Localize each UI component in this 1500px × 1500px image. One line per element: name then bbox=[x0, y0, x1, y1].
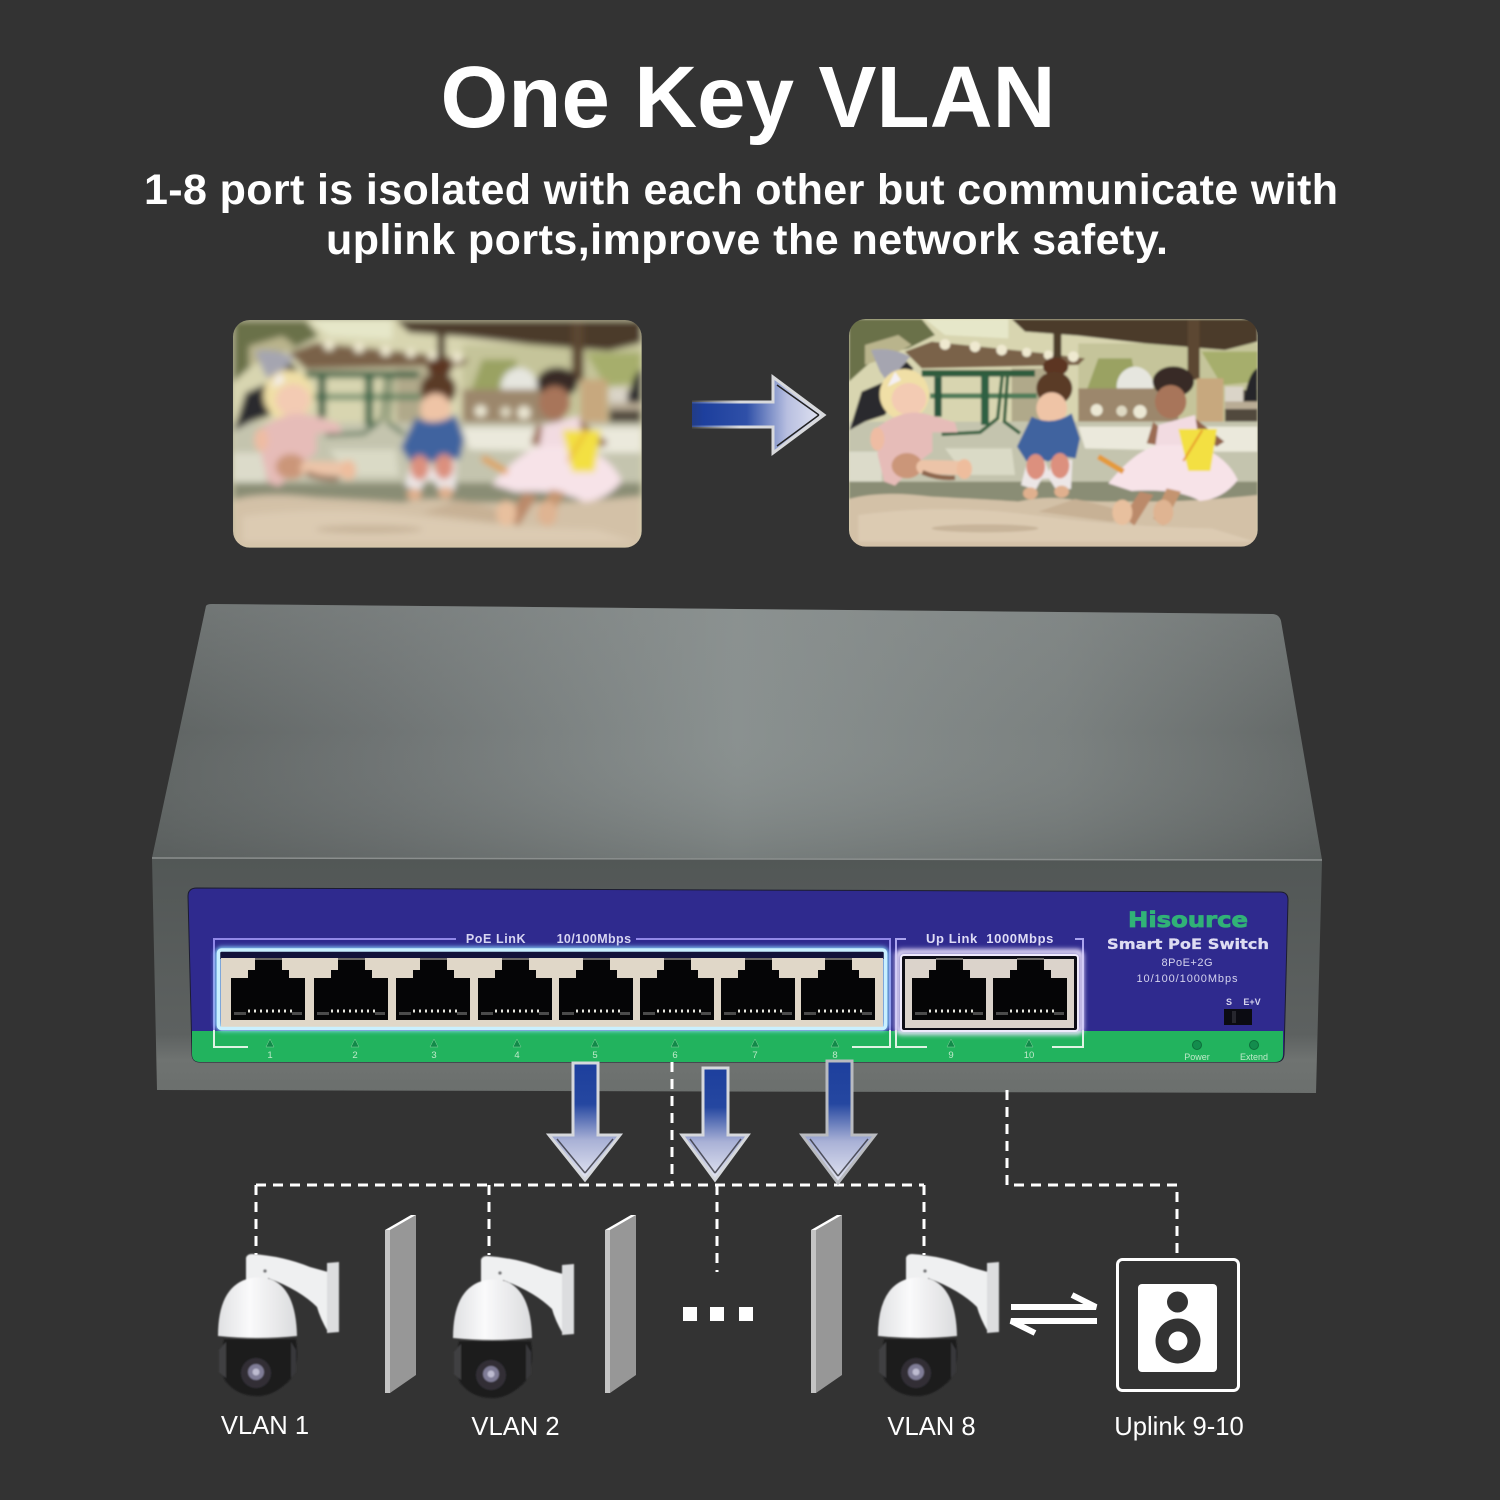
uplink port group bbox=[896, 931, 1083, 1047]
icon: uplink speaker bbox=[1118, 1260, 1238, 1390]
mode switch bbox=[1224, 997, 1261, 1025]
brand text: 10/100/1000Mbps bbox=[1136, 973, 1238, 985]
arrow: port group down 2 bbox=[682, 1068, 748, 1180]
mode switch: E+V bbox=[1243, 997, 1261, 1007]
port number labels: 9 bbox=[948, 1050, 954, 1061]
switch front face bbox=[152, 858, 1322, 1093]
title: One Key VLAN bbox=[440, 49, 1056, 146]
arrow: before to after bbox=[692, 377, 824, 453]
arrow: port group down 3 bbox=[802, 1061, 875, 1183]
arrow: port group down 1 bbox=[549, 1063, 620, 1180]
brand text bbox=[1107, 908, 1269, 985]
brand text: 8PoE+2G bbox=[1162, 957, 1212, 969]
status LEDs: Extend bbox=[1240, 1052, 1268, 1062]
photo: clear after bbox=[845, 315, 1265, 555]
PoE port group bbox=[214, 932, 890, 1047]
label: VLAN 8: VLAN 8 bbox=[887, 1413, 976, 1441]
subtitle: uplink ports,improve the network safety. bbox=[326, 216, 1168, 264]
label: VLAN 2: VLAN 2 bbox=[471, 1413, 560, 1441]
dashed network lines bbox=[256, 1062, 1177, 1272]
wall: isolation 2 bbox=[605, 1215, 636, 1393]
switch top face bbox=[152, 604, 1322, 860]
port number labels: 5 bbox=[592, 1050, 598, 1061]
status LEDs bbox=[1184, 1040, 1268, 1062]
port number labels: 4 bbox=[514, 1050, 520, 1061]
camera: VLAN 8 bbox=[878, 1254, 999, 1396]
label: VLAN 1: VLAN 1 bbox=[221, 1412, 309, 1440]
camera: VLAN 2 bbox=[453, 1256, 574, 1398]
port number labels: 2 bbox=[352, 1050, 358, 1061]
wall: isolation 1 bbox=[385, 1215, 416, 1393]
switch body bbox=[152, 604, 1322, 1093]
wall: isolation 3 bbox=[811, 1215, 842, 1393]
brand text: Hisource bbox=[1128, 908, 1248, 932]
camera: VLAN 1 bbox=[218, 1254, 339, 1396]
port number labels: 1 bbox=[267, 1050, 273, 1061]
port number labels bbox=[266, 1039, 1034, 1061]
switch front panel bbox=[188, 888, 1288, 1062]
subtitle bbox=[144, 166, 1338, 264]
icon: two-way arrows bbox=[1011, 1295, 1097, 1333]
ellipsis dots bbox=[683, 1307, 753, 1321]
brand text: Smart PoE Switch bbox=[1107, 937, 1269, 953]
port number labels: 7 bbox=[752, 1050, 758, 1061]
subtitle: 1-8 port is isolated with each other but communicate with bbox=[144, 166, 1338, 214]
port number labels: 6 bbox=[672, 1050, 678, 1061]
PoE port group: 10/100Mbps bbox=[557, 932, 631, 946]
mode switch: S bbox=[1226, 997, 1232, 1007]
status LEDs: Power bbox=[1184, 1052, 1210, 1062]
port number labels: 3 bbox=[431, 1050, 437, 1061]
label: Uplink 9-10: Uplink 9-10 bbox=[1114, 1413, 1244, 1441]
port number labels: 8 bbox=[832, 1050, 838, 1061]
PoE port group: PoE LinK bbox=[466, 932, 526, 946]
uplink port group: Up Link 1000Mbps bbox=[926, 931, 1054, 946]
photo: blurred before bbox=[229, 316, 649, 556]
port number labels: 10 bbox=[1024, 1050, 1034, 1061]
